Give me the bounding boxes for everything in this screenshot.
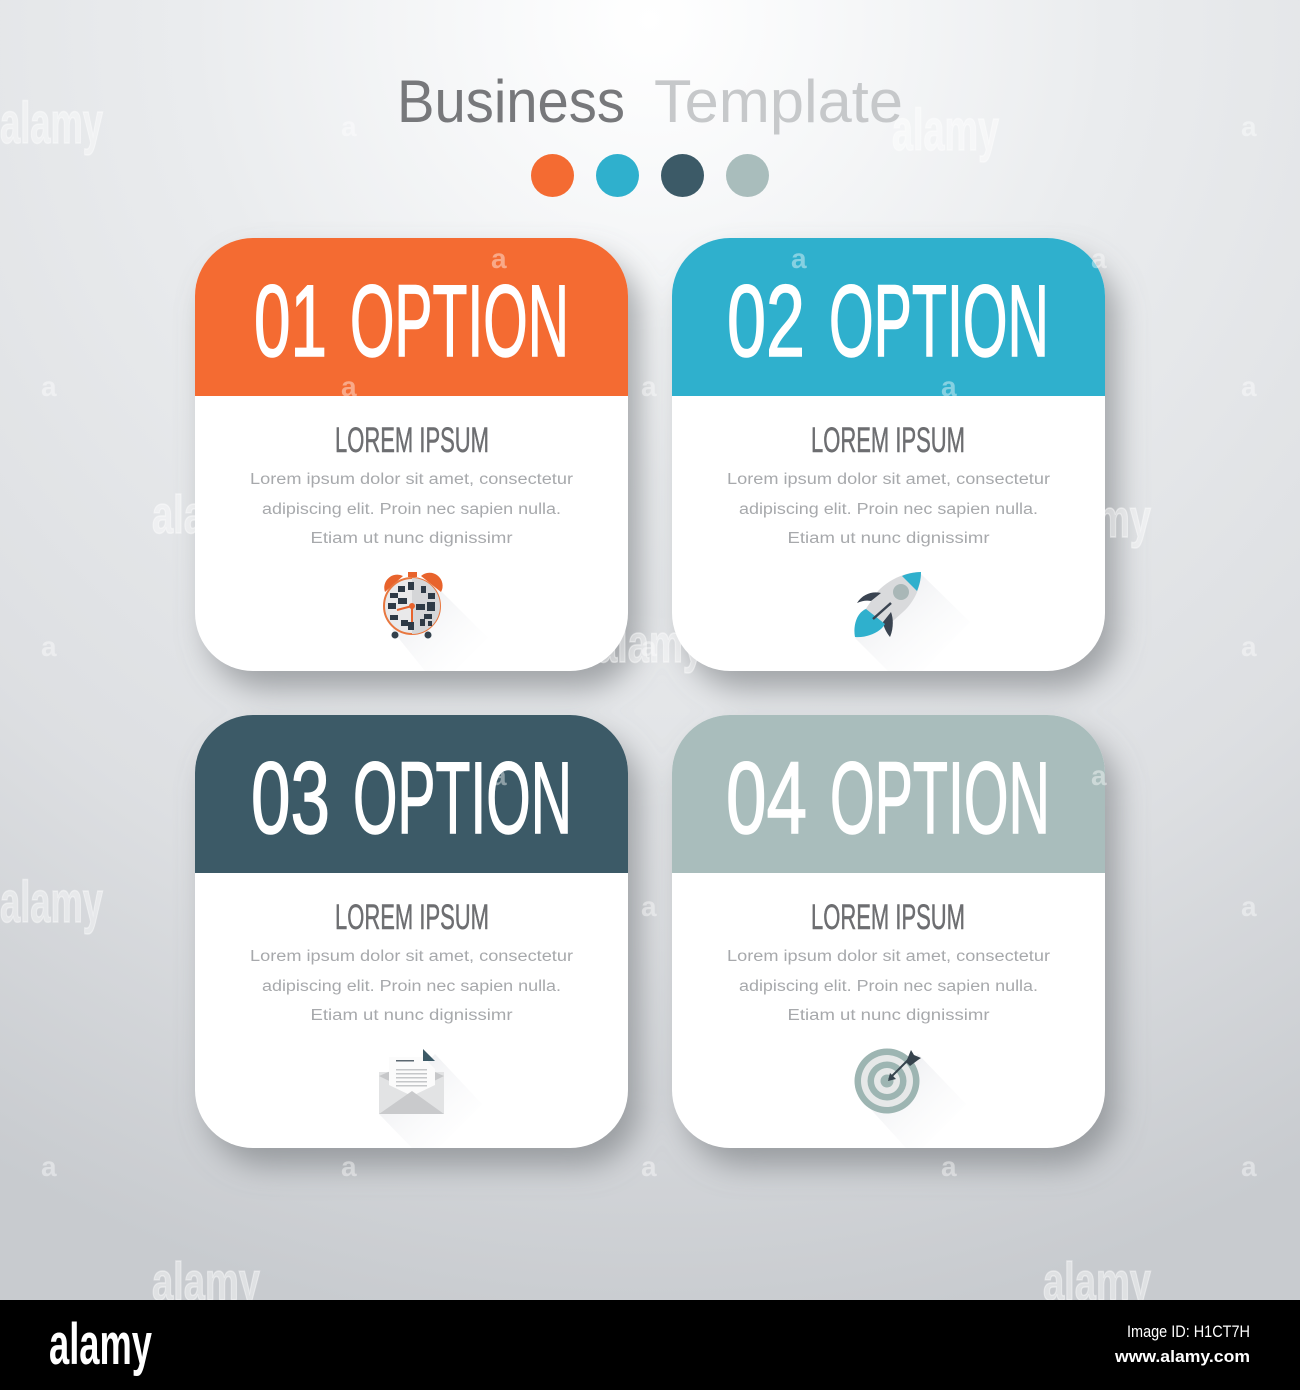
watermarks: alamy (1043, 1252, 1151, 1312)
footer bar (0, 1300, 1300, 1390)
body text: Etiam ut nunc dignissimr (310, 1007, 512, 1024)
panel: option 04 (672, 715, 1105, 1148)
watermarks: a (41, 371, 57, 402)
watermarks: alamy (0, 870, 103, 935)
heading: 04 option: OPTION (830, 741, 1050, 855)
body text (250, 471, 573, 547)
heading: 01 option: OPTION (350, 264, 569, 378)
watermarks: alamy (892, 98, 999, 163)
watermarks: a (341, 371, 357, 402)
body text: adipiscing elit. Proin nec sapien nulla. (739, 978, 1038, 995)
heading: 03 option: OPTION (353, 741, 572, 855)
subheading: lorem ipsum: LOREM IPSUM (811, 421, 965, 460)
heading: 02 option (727, 264, 1049, 378)
icon: envelope (379, 1049, 482, 1148)
colour dots (531, 154, 769, 197)
watermarks: a (941, 631, 957, 662)
watermarks: a (1241, 111, 1257, 142)
card shadows (207, 256, 1117, 1166)
watermarks: a (1241, 1151, 1257, 1182)
title: Template (654, 68, 903, 135)
heading: 01 option (254, 264, 569, 378)
body text: Lorem ipsum dolor sit amet, consectetur (727, 948, 1050, 965)
watermarks: a (1091, 760, 1107, 791)
watermarks: a (641, 891, 657, 922)
watermarks: a (641, 631, 657, 662)
watermarks: a (941, 1151, 957, 1182)
title: Business (397, 68, 625, 135)
subheading: lorem ipsum: LOREM IPSUM (335, 421, 489, 460)
heading: 02 option: OPTION (829, 264, 1049, 378)
watermarks: alamy (596, 614, 704, 674)
icon: alarm clock (384, 572, 488, 671)
header: option 02 (672, 238, 1105, 396)
heading: 01 option: 01 (254, 264, 327, 378)
body text: Lorem ipsum dolor sit amet, consectetur (727, 471, 1050, 488)
header: option 01 (195, 238, 628, 396)
watermarks: a (641, 371, 657, 402)
panel: option 03 (195, 715, 628, 1148)
watermarks: a (41, 631, 57, 662)
body text: Lorem ipsum dolor sit amet, consectetur (250, 471, 573, 488)
watermarks: alamy (0, 91, 103, 156)
subheading: lorem ipsum: LOREM IPSUM (335, 898, 489, 937)
heading: 03 option: 03 (251, 741, 330, 855)
heading: 03 option (251, 741, 572, 855)
watermarks: a (1241, 371, 1257, 402)
panel: option 02 (672, 238, 1105, 671)
body text: Lorem ipsum dolor sit amet, consectetur (250, 948, 573, 965)
heading: 02 option: 02 (727, 264, 805, 378)
body text (727, 948, 1050, 1024)
footer logo: alamy (49, 1312, 152, 1377)
body text: Etiam ut nunc dignissimr (788, 530, 990, 547)
watermarks: a (791, 243, 807, 274)
icon: rocket (854, 572, 970, 671)
watermarks: a (341, 631, 357, 662)
panel: option 01 (195, 238, 628, 671)
icon: target (854, 1048, 966, 1148)
watermarks: alamy (152, 1252, 260, 1312)
body text: adipiscing elit. Proin nec sapien nulla. (262, 501, 561, 518)
watermarks: a (41, 1151, 57, 1182)
body text: adipiscing elit. Proin nec sapien nulla. (262, 978, 561, 995)
watermarks: a (341, 111, 357, 142)
watermarks: a (641, 1151, 657, 1182)
image id: Image ID: H1CT7H (1127, 1322, 1250, 1341)
watermarks: a (1241, 891, 1257, 922)
heading: 04 option: 04 (726, 741, 807, 855)
watermarks: a (1241, 631, 1257, 662)
header: option 03 (195, 715, 628, 873)
body text (250, 948, 573, 1024)
body text: Etiam ut nunc dignissimr (788, 1007, 990, 1024)
heading: 04 option (726, 741, 1050, 855)
body text (727, 471, 1050, 547)
watermarks: alamy (1043, 489, 1151, 549)
watermarks: a (1091, 243, 1107, 274)
body text: Etiam ut nunc dignissimr (310, 530, 512, 547)
body text: adipiscing elit. Proin nec sapien nulla. (739, 501, 1038, 518)
header: option 04 (672, 715, 1105, 873)
url: www.alamy.com (1114, 1347, 1250, 1366)
watermarks: alamy (152, 485, 260, 545)
subheading: lorem ipsum: LOREM IPSUM (811, 898, 965, 937)
watermarks: a (941, 371, 957, 402)
watermarks: a (341, 1151, 357, 1182)
title (397, 68, 903, 135)
watermarks: a (491, 243, 507, 274)
watermarks: a (491, 760, 507, 791)
